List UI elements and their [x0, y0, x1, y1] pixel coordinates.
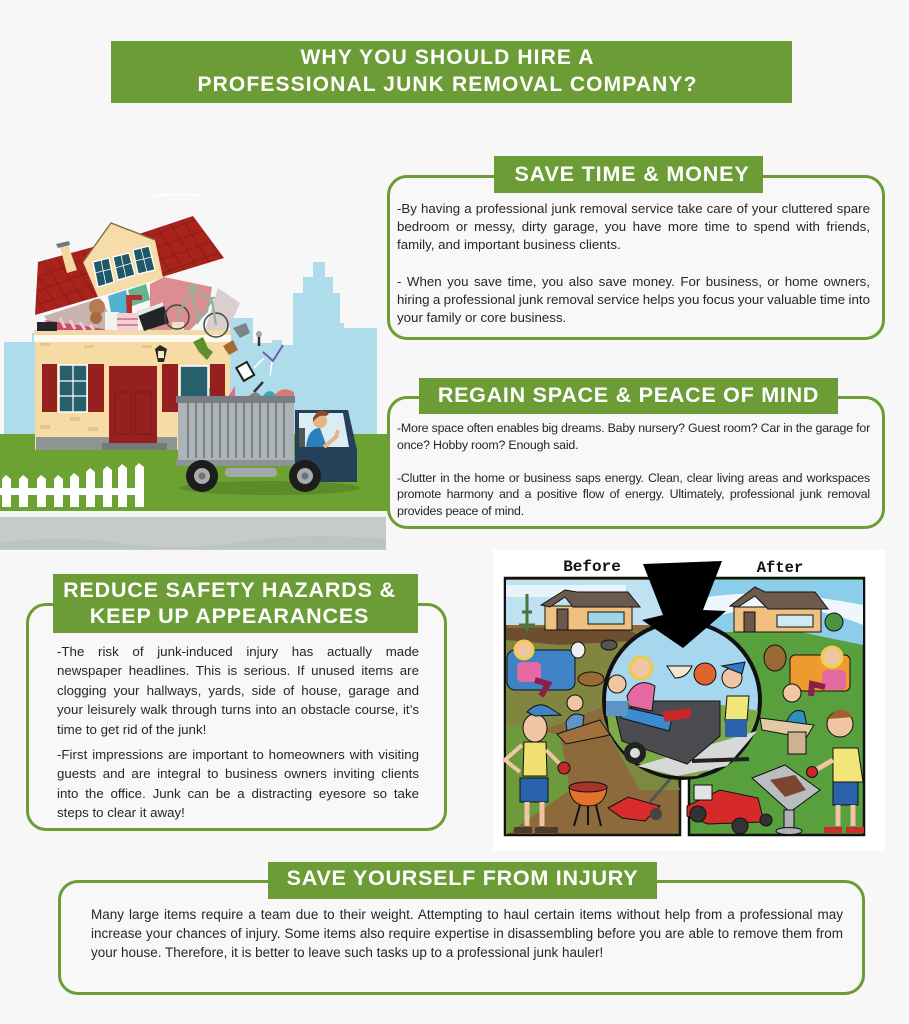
after panel: [687, 578, 864, 835]
boy at table: [783, 684, 801, 702]
pavement: [0, 517, 386, 550]
heading: regain space: [419, 378, 838, 414]
text: save yourself from injury: your house. Therefore, it is better to leave such tasks up to a professional junk hauler!: [91, 945, 603, 960]
woman in chair: [790, 655, 850, 691]
text: save time and money: hiring a professional junk removal service helps you focus your valuable time into: [397, 292, 870, 307]
grill: [752, 765, 820, 812]
panel: save yourself from injury: [58, 880, 865, 995]
text: reduce safety hazards: -First impressions are important to homeowners with visiting: [57, 747, 419, 762]
text: save time and money: [397, 201, 870, 325]
big black arrow: [642, 561, 726, 648]
illustration: overflowing house and junk truck: [0, 216, 387, 550]
panel: reduce safety hazards: [26, 603, 447, 831]
dog: [764, 645, 786, 671]
heading: regain space: REGAIN SPACE & PEACE OF MIND: [438, 383, 819, 407]
cloud: [150, 194, 203, 198]
text: regain space: promote harmony and a positive flow of energy. Ultimately, professional junk removal: [397, 487, 870, 501]
title banner: PROFESSIONAL JUNK REMOVAL COMPANY?: [197, 73, 698, 96]
before label: Before: [563, 558, 621, 576]
heading: reduce safety hazards: REDUCE SAFETY HAZARDS &: [63, 578, 396, 602]
text: save yourself from injury: increase your chances of injury. Some items also require expertise in disassembling before you are able to remove them from: [91, 926, 843, 941]
text: regain space: [397, 421, 870, 518]
house wall: [35, 335, 230, 450]
text: reduce safety hazards: into the office. Junk can be a distracting eyesore so take: [57, 786, 419, 801]
text: save time and money: family, and important business clients.: [397, 237, 621, 252]
text: reduce safety hazards: your leisurely walk through turns into an obstacle course, it’s: [57, 702, 419, 717]
ride-on mower: [687, 790, 764, 824]
lawn: [0, 434, 387, 511]
heading: reduce safety hazards: [53, 574, 418, 633]
man with bbq: [523, 714, 547, 742]
man with grill: [827, 711, 853, 737]
text: reduce safety hazards: newspaper headlines. This is serious. If unused items are: [57, 663, 419, 678]
junk pile: [37, 277, 240, 337]
text: reduce safety hazards: time to get rid of the junk!: [57, 722, 206, 737]
text: regain space: provides peace of mind.: [397, 504, 524, 518]
text: save time and money: - When you save time, you also save money. For business, or home owners,: [397, 274, 870, 289]
dog and rubbish: [578, 672, 604, 686]
text: reduce safety hazards: guests and are integral to business owners inviting clients: [57, 766, 419, 781]
white curb: [0, 511, 387, 517]
after label: After: [757, 559, 803, 577]
text: regain space: once? Hobby room? Enough said.: [397, 438, 578, 452]
chimney: [56, 241, 77, 273]
tilted roof: [35, 216, 224, 315]
heading: reduce safety hazards: KEEP UP APPEARANCES: [90, 604, 369, 628]
text: save yourself from injury: Many large items require a team due to their weight. Attempting to haul certain items without help from a professional may: [91, 907, 843, 922]
flying junk: [193, 323, 294, 397]
dumpster truck: [176, 396, 360, 495]
trailer: [615, 701, 720, 764]
heading: save yourself from injury: SAVE YOURSELF FROM INJURY: [287, 866, 638, 890]
text: save time and money: -By having a professional junk removal service take care of your cluttered spare: [397, 201, 870, 216]
picket fence: [0, 463, 144, 507]
lawn mower: [608, 797, 660, 821]
text: reduce safety hazards: clogging your hallways, yards, side of house, garage and: [57, 683, 419, 698]
heading: save time and money: [494, 156, 763, 193]
heading: save time and money: SAVE TIME & MONEY: [514, 162, 750, 186]
text: reduce safety hazards: steps to clear it away!: [57, 805, 185, 820]
text: save time and money: bedroom or messy, dirty garage, you have more time to spend with friends,: [397, 219, 870, 234]
woman on couch: [507, 650, 575, 690]
illustration: before and after cartoon: [502, 558, 866, 836]
house shutters, windows and door: [42, 345, 225, 450]
text: regain space: -Clutter in the home or business saps energy. Clean, clear living areas and workspaces: [397, 471, 870, 485]
title banner: [111, 41, 792, 103]
city skyline: [4, 262, 377, 434]
panel: save time and money: [387, 175, 885, 340]
text: regain space: -More space often enables big dreams. Baby nursery? Guest room? Car in the garage for: [397, 421, 870, 435]
before panel: [505, 578, 680, 835]
dormer: [83, 223, 163, 297]
before house: [545, 606, 632, 630]
helpers: [630, 657, 652, 679]
heading: save yourself from injury: [268, 862, 657, 899]
text: reduce safety hazards: [57, 644, 419, 820]
text: save time and money: your family or core business.: [397, 310, 566, 325]
boy and broken table: [567, 695, 583, 711]
text: reduce safety hazards: -The risk of junk-induced injury has actually made: [57, 644, 419, 659]
panel: regain space: [387, 396, 885, 529]
title banner: WHY YOU SHOULD HIRE A: [300, 46, 595, 69]
text: save yourself from injury: [91, 907, 843, 960]
central circle scene: [604, 622, 760, 778]
